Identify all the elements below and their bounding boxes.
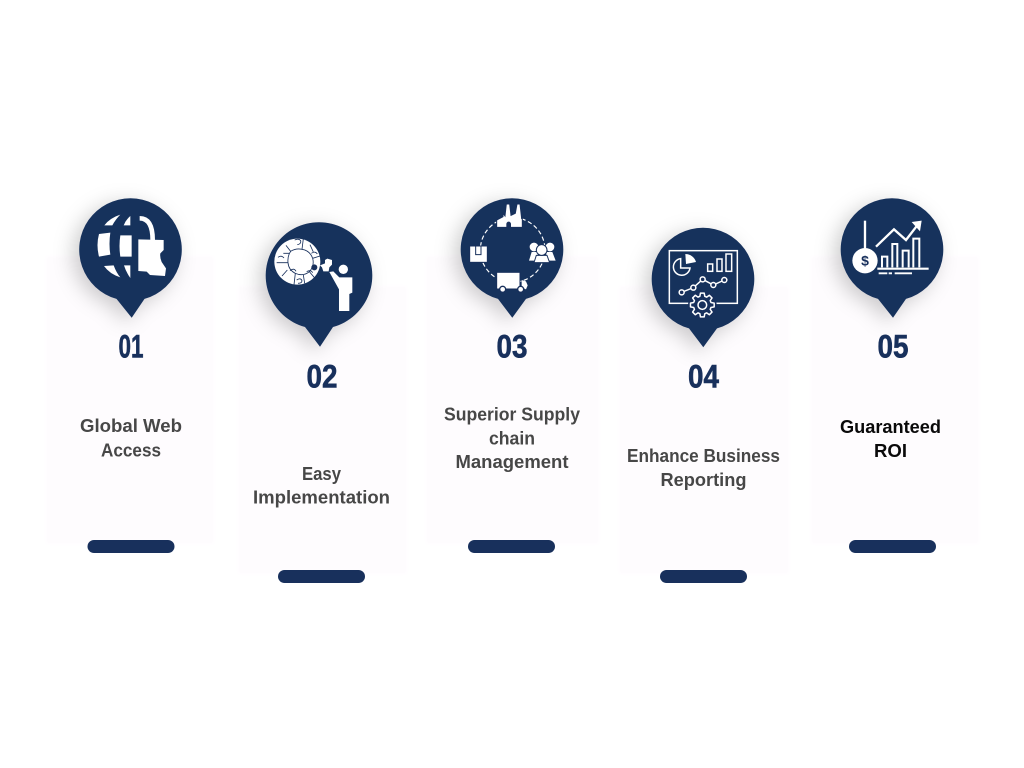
map pin [652, 228, 754, 347]
label: Superior Supply chain Management: chain [489, 428, 535, 448]
bar [278, 570, 365, 583]
card background [426, 256, 599, 544]
card background [811, 256, 979, 544]
number 01: 01 [118, 328, 144, 364]
number 03: 03 [496, 328, 528, 364]
label: Enhance Business Reporting: Enhance Business [627, 446, 780, 466]
label: Guaranteed ROI [840, 417, 941, 461]
panel: step 01 Global Web Access [46, 198, 214, 553]
label: Enhance Business Reporting [627, 446, 780, 490]
card background [46, 256, 214, 544]
label: Enhance Business Reporting: Reporting [660, 470, 746, 490]
label: Easy Implementation: Easy [302, 464, 341, 484]
label: Easy Implementation [253, 464, 390, 508]
bar [660, 570, 747, 583]
label: Superior Supply chain Management: Management [456, 452, 568, 472]
number 05: 05 [878, 328, 908, 364]
map pin [79, 198, 182, 318]
label: Global Web Access: Global Web [80, 416, 182, 436]
label: Global Web Access: Access [101, 440, 161, 460]
label: Guaranteed ROI: ROI [874, 441, 907, 461]
label: Global Web Access [80, 416, 182, 460]
map pin [266, 222, 372, 347]
map pin [841, 198, 943, 318]
icon: globe with padlock [97, 215, 166, 278]
card background [619, 286, 789, 574]
icon: supply chain cycle [470, 204, 556, 292]
icon: growth chart with dollar coin [852, 221, 929, 273]
label: Superior Supply chain Management: Superior Supply [444, 404, 580, 424]
number 02: 02 [306, 358, 338, 394]
panel: step 03 Superior Supply chain Management [426, 198, 599, 553]
card background [238, 286, 407, 574]
bar [468, 540, 555, 553]
panel: step 04 Enhance Business Reporting [619, 228, 789, 583]
icon: puzzle globe and person [274, 239, 352, 311]
map pin [461, 198, 563, 318]
label: Easy Implementation: Implementation [253, 488, 390, 508]
number 04: 04 [688, 358, 719, 394]
label: Superior Supply chain Management [444, 404, 580, 472]
bar [849, 540, 936, 553]
bar [88, 540, 174, 553]
panel: step 02 Easy Implementation [238, 222, 407, 583]
label: Guaranteed ROI: Guaranteed [840, 417, 941, 437]
panel: step 05 Guaranteed ROI [811, 198, 979, 553]
icon: analytics dashboard with gear [669, 251, 737, 319]
icon: growth chart with dollar coin: $ [861, 253, 869, 269]
